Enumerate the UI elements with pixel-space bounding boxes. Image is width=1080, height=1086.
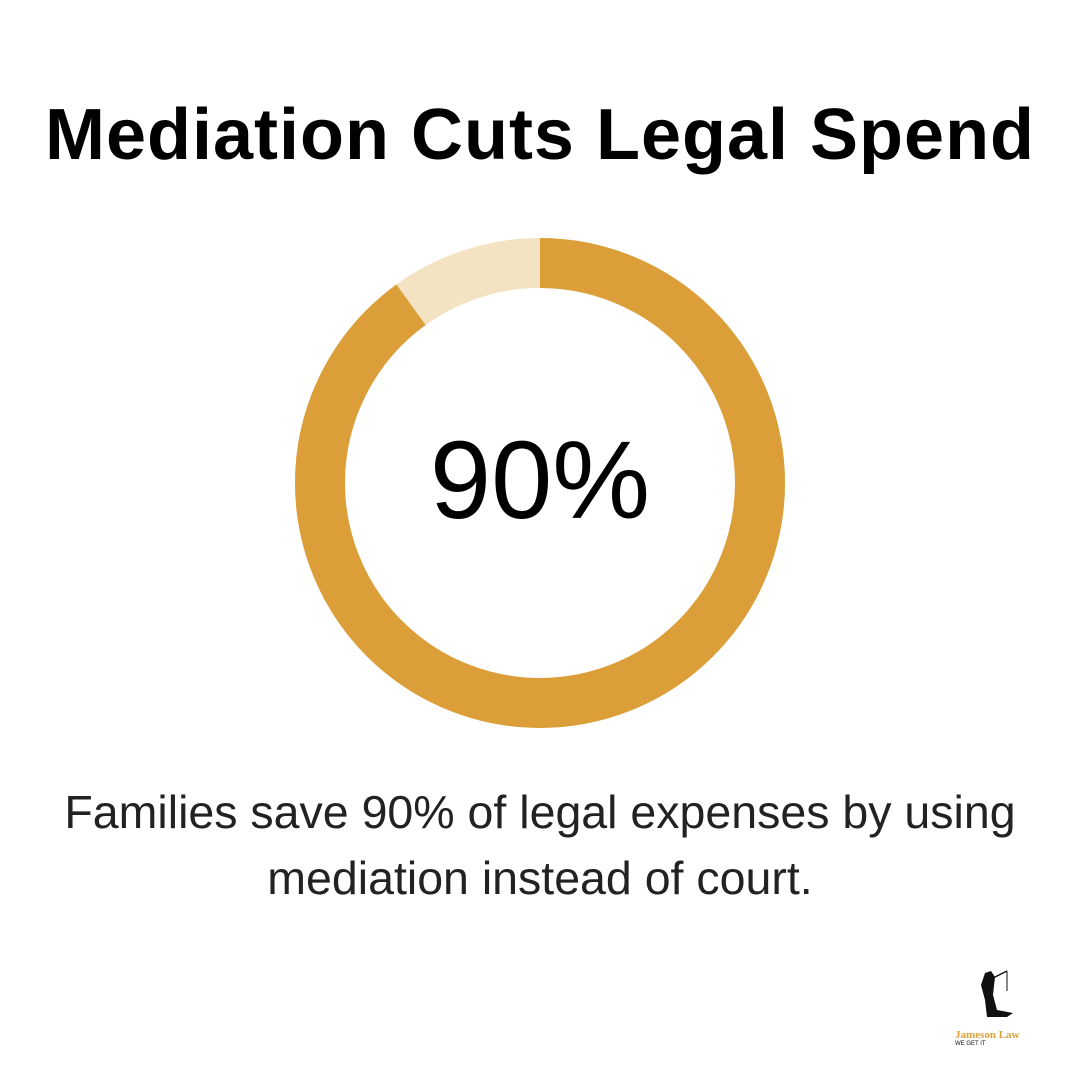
logo: Jameson Law bbox=[955, 1029, 1019, 1041]
title: Mediation Cuts Legal Spend bbox=[45, 95, 1035, 175]
logo bbox=[955, 970, 1020, 1047]
description text bbox=[64, 786, 1016, 904]
description text: mediation instead of court. bbox=[267, 852, 813, 904]
description text: Families save 90% of legal expenses by using bbox=[64, 786, 1016, 838]
logo: WE GET IT bbox=[955, 1041, 986, 1047]
donut chart: 90% bbox=[430, 419, 650, 542]
